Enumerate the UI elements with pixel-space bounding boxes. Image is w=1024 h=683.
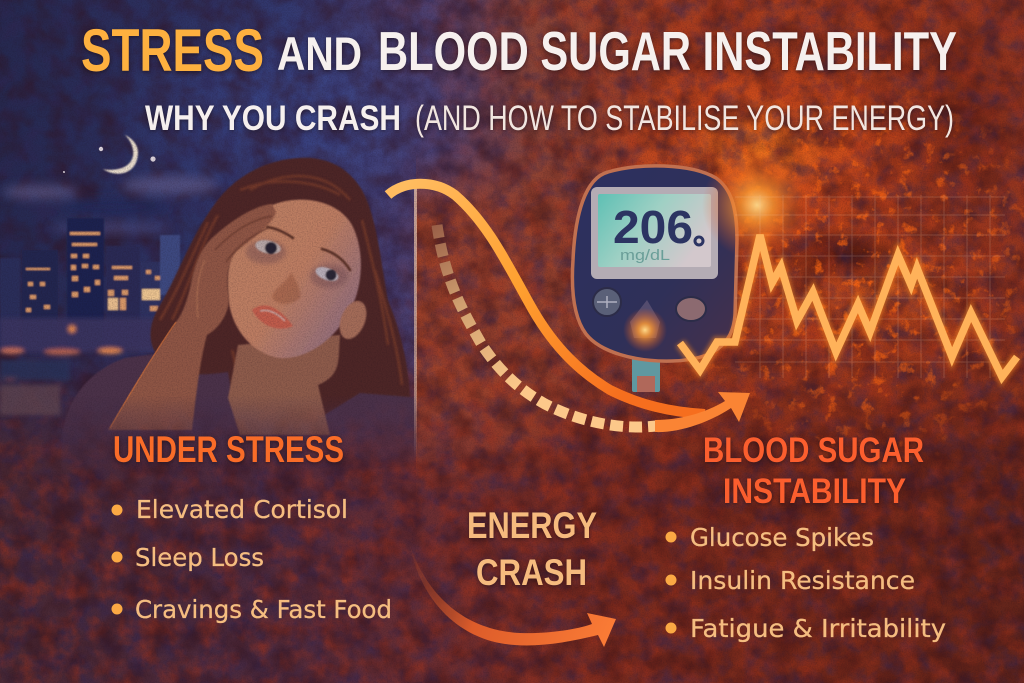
item elevated cortisol: Elevated Cortisol bbox=[136, 495, 348, 524]
nose shadow bbox=[272, 272, 300, 304]
raised hand and arm bbox=[108, 204, 276, 430]
meter test strip bbox=[632, 358, 660, 392]
woman under stress bbox=[66, 156, 414, 452]
meter buttons bbox=[593, 288, 706, 321]
neck and chest bbox=[228, 335, 340, 435]
panel: under stress bbox=[112, 429, 392, 624]
energy crash label bbox=[467, 505, 597, 593]
mouth bbox=[252, 305, 293, 329]
item cravings: Cravings & Fast Food bbox=[135, 595, 392, 624]
energy crash label: CRASH bbox=[476, 552, 587, 593]
eye sockets bbox=[246, 240, 348, 288]
item sleep loss: Sleep Loss bbox=[135, 543, 264, 572]
panel: blood sugar instability bbox=[666, 431, 946, 643]
spike glow bbox=[702, 150, 812, 260]
subtitle bbox=[145, 99, 954, 138]
arrowhead bbox=[655, 392, 750, 432]
meter ember glow bbox=[623, 300, 667, 352]
crescent moon bbox=[103, 135, 138, 174]
heading bbox=[703, 431, 924, 511]
item glucose spikes: Glucose Spikes bbox=[690, 523, 874, 552]
hair highlights bbox=[159, 174, 404, 386]
energy crash label: ENERGY bbox=[467, 505, 597, 546]
rim light on arm bbox=[110, 322, 176, 428]
eyebrows bbox=[267, 227, 350, 270]
title: STRESS bbox=[81, 17, 264, 84]
ear bbox=[339, 300, 368, 340]
list bbox=[666, 523, 946, 643]
city lights bokeh bbox=[0, 318, 165, 415]
title: AND bbox=[277, 27, 362, 80]
item insulin resistance: Insulin Resistance bbox=[690, 566, 915, 595]
vertical divider bbox=[414, 188, 417, 458]
title bbox=[81, 17, 957, 84]
stars bbox=[63, 147, 156, 173]
solid curved arrow bbox=[388, 184, 705, 414]
list bbox=[112, 495, 392, 624]
face bbox=[228, 200, 361, 358]
heading: INSTABILITY bbox=[723, 472, 906, 511]
meter screen bbox=[591, 187, 718, 279]
meter body bbox=[572, 166, 737, 361]
hair bbox=[150, 158, 410, 430]
shirt and shoulders bbox=[66, 354, 414, 452]
heading: BLOOD SUGAR bbox=[703, 431, 924, 470]
heading: UNDER STRESS bbox=[113, 429, 344, 470]
unit: mg/dL bbox=[620, 247, 670, 264]
reading: 206 bbox=[613, 201, 693, 253]
clouds bbox=[2, 176, 218, 233]
subtitle: WHY YOU CRASH bbox=[145, 99, 401, 138]
night city scene bbox=[0, 135, 218, 415]
glucose chart grid bbox=[735, 195, 1005, 378]
glucose line chart bbox=[680, 235, 1017, 377]
eyes bbox=[254, 238, 340, 284]
energy crash arrow bbox=[410, 545, 616, 647]
dashed curved arrow bbox=[437, 225, 656, 427]
glucose meter bbox=[572, 166, 737, 392]
item fatigue: Fatigue & Irritability bbox=[690, 614, 946, 643]
skyline bbox=[0, 218, 180, 352]
finger lines bbox=[197, 216, 272, 318]
